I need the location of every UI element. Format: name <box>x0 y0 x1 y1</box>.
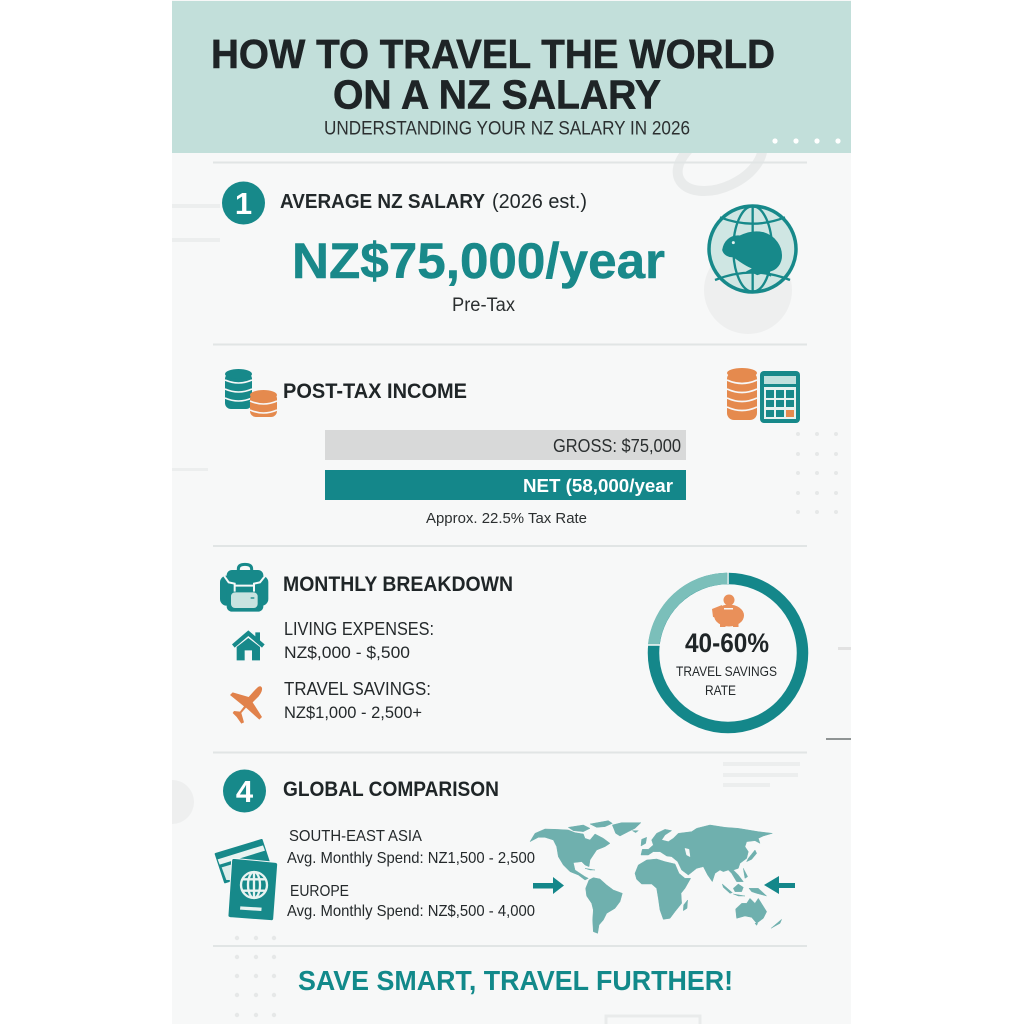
icon: credit card and passport <box>216 840 278 921</box>
heading: monthly breakdown: MONTHLY BREAKDOWN <box>283 573 513 596</box>
tax rate note: Approx. 22.5% Tax Rate <box>426 510 587 527</box>
subtitle: UNDERSTANDING YOUR NZ SALARY IN 2026 <box>324 118 690 140</box>
panel: post-tax income <box>225 368 800 527</box>
donut chart: 40-60% <box>685 628 769 658</box>
travel savings: TRAVEL SAVINGS: <box>284 679 431 699</box>
travel savings <box>284 679 431 722</box>
travel savings: NZ$1,000 - 2,500+ <box>284 703 422 722</box>
heading: average salary: AVERAGE NZ SALARY <box>280 191 486 213</box>
heading: post-tax income: POST-TAX INCOME <box>283 380 467 403</box>
region: europe <box>287 883 535 920</box>
infographic <box>172 1 851 1024</box>
title: ON A NZ SALARY <box>333 72 661 118</box>
header banner <box>172 1 851 153</box>
bar: gross: GROSS: $75,000 <box>553 436 681 456</box>
bar: gross <box>325 430 686 460</box>
icon: plane <box>230 686 262 724</box>
pre-tax label: Pre-Tax <box>452 295 515 316</box>
salary figure: NZ$75,000/year <box>292 233 665 289</box>
donut chart <box>647 571 802 728</box>
bar: net <box>325 470 686 500</box>
region: south-east asia <box>287 828 535 867</box>
call to action: SAVE SMART, TRAVEL FURTHER! <box>298 965 733 996</box>
arrow: right-pointing <box>533 877 564 894</box>
icon: kiwi globe <box>709 206 796 292</box>
panel: monthly breakdown <box>220 564 802 728</box>
title: HOW TO TRAVEL THE WORLD <box>211 31 775 77</box>
donut chart: RATE <box>705 682 736 698</box>
background decor <box>150 117 851 1024</box>
number badge 1 <box>222 182 265 224</box>
bar: net: NET (58,000/year <box>523 476 673 496</box>
number badge 4 <box>223 770 266 812</box>
title <box>211 31 775 118</box>
world map <box>530 821 782 933</box>
number badge 1: 1 <box>235 186 252 221</box>
donut chart: TRAVEL SAVINGS <box>676 663 777 679</box>
panel: global comparison <box>216 770 795 933</box>
living expenses <box>284 619 434 662</box>
heading: global comparison: GLOBAL COMPARISON <box>283 778 499 801</box>
region: south-east asia: Avg. Monthly Spend: NZ1,500 - 2,500 <box>287 850 535 867</box>
panel: average salary <box>222 182 796 316</box>
arrow: left-pointing <box>764 876 795 894</box>
icon: backpack <box>220 564 268 612</box>
icon: coins and calculator <box>727 368 800 423</box>
icon: house <box>232 630 265 660</box>
number badge 4: 4 <box>236 774 254 809</box>
heading: average salary: (2026 est.) <box>492 191 587 213</box>
living expenses: LIVING EXPENSES: <box>284 619 434 639</box>
header dots <box>772 138 841 144</box>
region: south-east asia: SOUTH-EAST ASIA <box>289 828 422 845</box>
living expenses: NZ$,000 - $,500 <box>284 643 410 662</box>
icon: stacked coins <box>225 369 277 417</box>
region: europe: EUROPE <box>290 883 349 900</box>
region: europe: Avg. Monthly Spend: NZ$,500 - 4,000 <box>287 903 535 920</box>
icon: piggy bank <box>712 594 744 627</box>
